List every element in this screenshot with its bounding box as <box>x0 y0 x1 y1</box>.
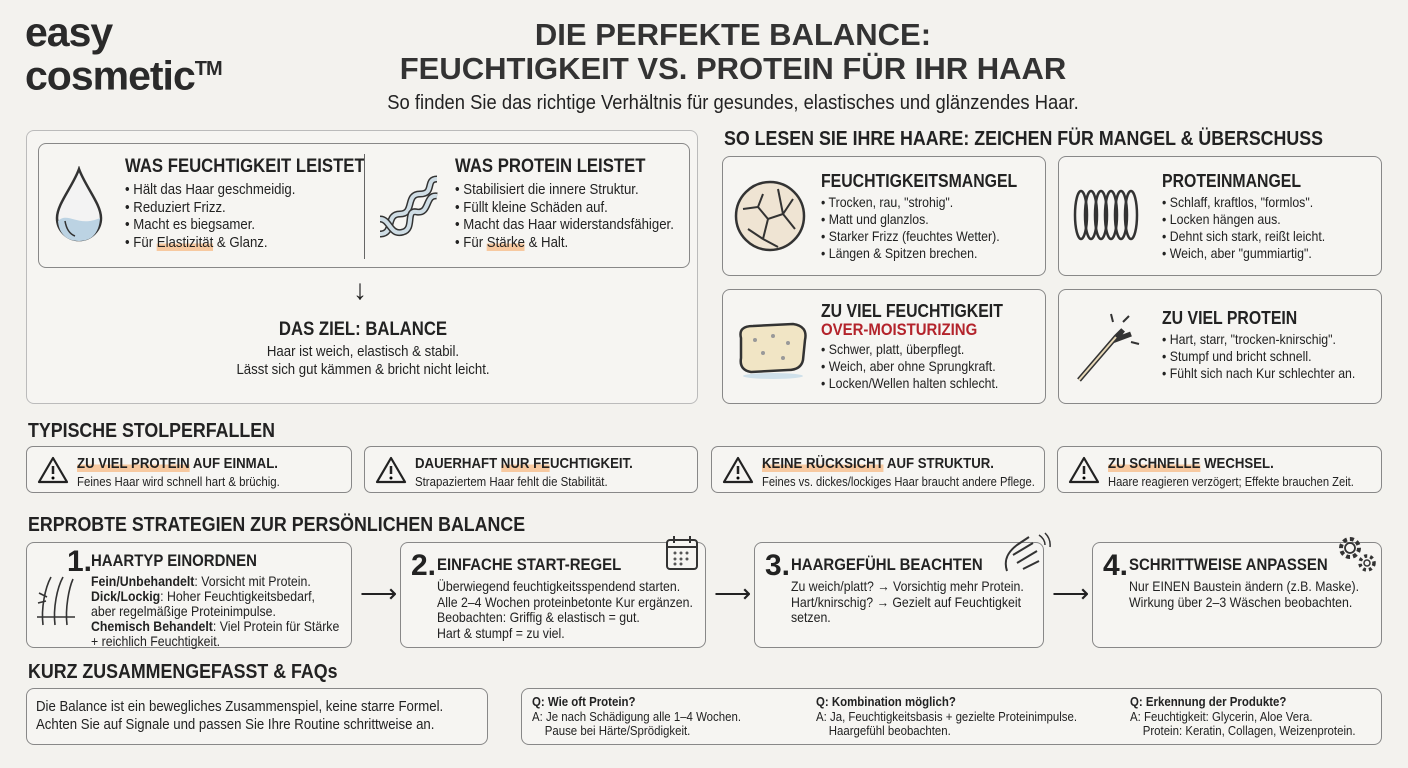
goal: DAS ZIEL: BALANCE <box>279 319 447 340</box>
title <box>400 17 1066 86</box>
card: zu viel protein <box>1058 289 1382 404</box>
panel: basics <box>26 130 698 404</box>
text: protein: Macht das Haar widerstandsfähiger. <box>463 216 674 233</box>
card: zu viel feuchtigkeit: Locken/Wellen halten schlecht. <box>829 375 998 391</box>
text: feuchtigkeit: Hält das Haar geschmeidig. <box>133 181 295 198</box>
step 1: HAARTYP EINORDNEN <box>91 551 257 570</box>
card: zu viel protein: Stumpf und bricht schnell. <box>1170 348 1312 364</box>
step 3: Zu weich/platt? → Vorsichtig mehr Protein. <box>791 578 1024 594</box>
card: proteinmangel <box>1058 156 1382 276</box>
goal: Lässt sich gut kämmen & bricht nicht leicht. <box>236 361 490 378</box>
step 3: HAARGEFÜHL BEACHTEN <box>791 555 983 574</box>
card: proteinmangel: Dehnt sich stark, reißt leicht. <box>1170 228 1325 244</box>
faq 3: Q: Erkennung der Produkte? <box>1130 694 1286 709</box>
goal <box>236 319 490 378</box>
warning 3: Feines vs. dickes/lockiges Haar braucht andere Pflege. <box>762 474 1035 489</box>
arrow down: ↓ <box>353 274 367 305</box>
logo: cosmeticTM <box>25 53 222 99</box>
step 4 <box>1092 542 1382 648</box>
heading: signs: SO LESEN SIE IHRE HAARE: ZEICHEN FÜR MANGEL & ÜBERSCHUSS <box>724 128 1323 150</box>
faq 1 <box>532 694 741 738</box>
warning 2: DAUERHAFT NUR FEUCHTIGKEIT. <box>415 455 633 472</box>
goal: Haar ist weich, elastisch & stabil. <box>267 343 459 360</box>
card: feuchtigkeitsmangel: Trocken, rau, "strohig". <box>829 194 953 210</box>
card: feuchtigkeitsmangel <box>722 156 1046 276</box>
icon: protein helix <box>380 176 438 238</box>
step 4: Nur EINEN Baustein ändern (z.B. Maske). <box>1129 578 1359 594</box>
heading: summary: KURZ ZUSAMMENGEFASST & FAQs <box>28 661 338 683</box>
faq 3: A: Feuchtigkeit: Glycerin, Aloe Vera. <box>1130 708 1313 724</box>
step 2: 2. <box>411 549 436 582</box>
text: feuchtigkeit <box>125 156 365 251</box>
step 1: + reichlich Feuchtigkeit. <box>91 633 220 649</box>
card: feuchtigkeitsmangel: Längen & Spitzen brechen. <box>829 245 977 261</box>
step 1: Fein/Unbehandelt: Vorsicht mit Protein. <box>91 573 311 589</box>
card: proteinmangel: PROTEINMANGEL <box>1162 171 1301 191</box>
summary box: Die Balance ist ein bewegliches Zusammenspiel, keine starre Formel. <box>36 698 443 715</box>
subtitle: So finden Sie das richtige Verhältnis für gesundes, elastisches und glänzendes Haar. <box>387 92 1079 114</box>
step 3 <box>754 542 1044 648</box>
text: protein <box>455 156 674 251</box>
step 3: Hart/knirschig? → Gezielt auf Feuchtigkeit <box>791 594 1021 610</box>
warning 4: Haare reagieren verzögert; Effekte brauchen Zeit. <box>1108 474 1354 489</box>
arrow: ⟶ <box>1052 578 1089 608</box>
faq 2: A: Ja, Feuchtigkeitsbasis + gezielte Proteinimpulse. <box>816 708 1077 724</box>
warning 2 <box>364 446 698 493</box>
warning 1: ZU VIEL PROTEIN AUF EINMAL. <box>77 455 278 472</box>
card: zu viel feuchtigkeit: Schwer, platt, überpflegt. <box>829 341 964 357</box>
faq 1: A: Je nach Schädigung alle 1–4 Wochen. <box>532 708 741 724</box>
icon: water drop <box>56 166 102 242</box>
warning 1: Feines Haar wird schnell hart & brüchig. <box>77 474 280 489</box>
card: feuchtigkeitsmangel: FEUCHTIGKEITSMANGEL <box>821 171 1017 191</box>
faq 3: Protein: Keratin, Collagen, Weizenprotein. <box>1143 723 1356 738</box>
text: feuchtigkeit: Reduziert Frizz. <box>133 198 226 216</box>
text: feuchtigkeit: Macht es biegsamer. <box>133 216 255 233</box>
logo <box>25 9 222 99</box>
warning 2: Strapaziertem Haar fehlt die Stabilität. <box>415 474 608 489</box>
step 3: 3. <box>765 549 790 582</box>
card: feuchtigkeitsmangel: Matt und glanzlos. <box>829 211 929 227</box>
card: zu viel protein: ZU VIEL PROTEIN <box>1162 308 1297 328</box>
summary box: Achten Sie auf Signale und passen Sie Ihre Routine schrittweise an. <box>36 716 434 733</box>
heading: pitfalls: TYPISCHE STOLPERFALLEN <box>28 420 275 442</box>
card: zu viel feuchtigkeit: Weich, aber ohne Sprungkraft. <box>829 358 996 374</box>
step 4: Wirkung über 2–3 Wäschen beobachten. <box>1129 594 1352 610</box>
card: proteinmangel: Weich, aber "gummiartig". <box>1170 245 1312 261</box>
step 4: SCHRITTWEISE ANPASSEN <box>1129 555 1328 574</box>
step 2: EINFACHE START-REGEL <box>437 555 621 574</box>
summary box <box>26 688 488 745</box>
card: zu viel protein: Hart, starr, "trocken-knirschig". <box>1170 331 1336 347</box>
heading: strategies: ERPROBTE STRATEGIEN ZUR PERSÖNLICHEN BALANCE <box>28 514 525 536</box>
text: protein: WAS PROTEIN LEISTET <box>455 156 645 177</box>
warning 4 <box>1057 446 1382 493</box>
inner box <box>38 143 690 268</box>
step 2 <box>400 542 706 648</box>
arrow: ⟶ <box>360 578 397 608</box>
warning 3: KEINE RÜCKSICHT AUF STRUKTUR. <box>762 455 994 472</box>
title: DIE PERFEKTE BALANCE: <box>535 17 931 52</box>
step 2: Alle 2–4 Wochen proteinbetonte Kur ergänzen. <box>437 594 693 610</box>
step 1: 1. <box>67 545 92 578</box>
faq 3 <box>1130 694 1356 738</box>
card: zu viel protein: Fühlt sich nach Kur schlechter an. <box>1170 365 1355 381</box>
step 3: setzen. <box>791 609 831 625</box>
card: feuchtigkeitsmangel: Starker Frizz (feuchtes Wetter). <box>829 228 1000 244</box>
faq 2 <box>816 694 1077 738</box>
step 2: Überwiegend feuchtigkeitsspendend starten. <box>437 578 680 594</box>
text: protein: Für Stärke & Halt. <box>463 234 568 250</box>
text: feuchtigkeit: WAS FEUCHTIGKEIT LEISTET <box>125 156 365 177</box>
faq 2: Haargefühl beobachten. <box>829 723 951 738</box>
title: FEUCHTIGKEIT VS. PROTEIN FÜR IHR HAAR <box>400 51 1066 86</box>
step 2: Beobachten: Griffig & elastisch = gut. <box>437 609 640 625</box>
step 2: Hart & stumpf = zu viel. <box>437 624 565 640</box>
step 1: Dick/Lockig: Hoher Feuchtigkeitsbedarf, <box>91 588 315 604</box>
step 1: Chemisch Behandelt: Viel Protein für Stärke <box>91 618 339 634</box>
card: zu viel feuchtigkeit: ZU VIEL FEUCHTIGKEIT <box>821 301 1003 321</box>
warning 3 <box>711 446 1045 493</box>
text: protein: Füllt kleine Schäden auf. <box>463 198 608 216</box>
faq 1: Pause bei Härte/Sprödigkeit. <box>545 723 690 738</box>
card: proteinmangel: Schlaff, kraftlos, "formlos". <box>1170 194 1313 210</box>
faq 1: Q: Wie oft Protein? <box>532 694 635 709</box>
text: protein: Stabilisiert die innere Struktur. <box>463 181 639 198</box>
card: proteinmangel: Locken hängen aus. <box>1170 211 1281 227</box>
arrow: ⟶ <box>714 578 751 608</box>
step 4: 4. <box>1103 549 1128 582</box>
card: zu viel feuchtigkeit: OVER-MOISTURIZING <box>821 320 977 339</box>
faq 2: Q: Kombination möglich? <box>816 694 956 709</box>
text: feuchtigkeit: Für Elastizität & Glanz. <box>133 234 268 250</box>
step 1: aber regelmäßige Proteinimpulse. <box>91 603 276 619</box>
warning 1 <box>26 446 352 493</box>
warning 4: ZU SCHNELLE WECHSEL. <box>1108 455 1274 472</box>
FAQ box <box>521 688 1382 745</box>
logo: easy <box>25 9 112 55</box>
card: zu viel feuchtigkeit <box>722 289 1046 404</box>
step 1 <box>26 542 352 648</box>
